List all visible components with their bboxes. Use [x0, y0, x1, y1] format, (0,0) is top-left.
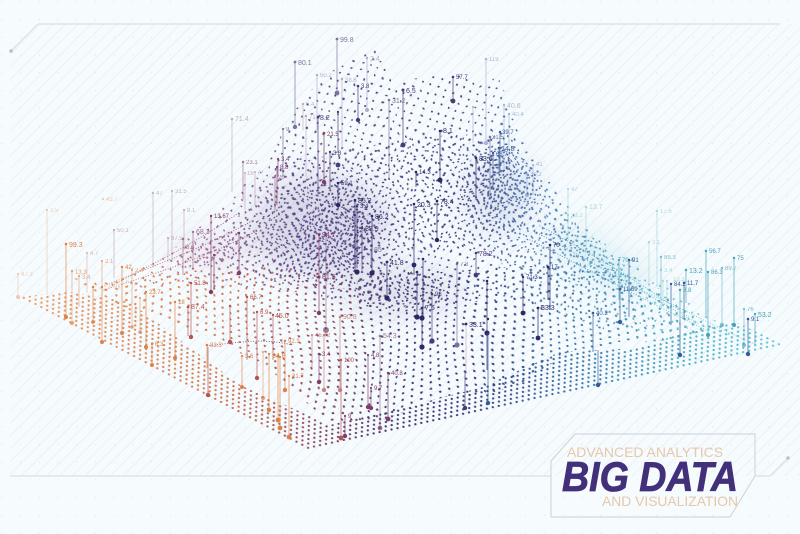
pin group: purple peak: 6.5 — [406, 88, 416, 95]
pin group: navy centre: 85.2 — [358, 198, 372, 205]
pin group: red and magenta centre left: 9.7 — [374, 386, 383, 392]
pin group: blue and cyan right: 17.5 — [660, 209, 672, 215]
pin group: purple peak: 40.6 — [507, 103, 521, 110]
pin group: orange left: 47 — [156, 191, 163, 197]
pin group: orange left: 2.1 — [105, 259, 114, 265]
pin group: navy centre: 78.4 — [440, 199, 454, 206]
pin group: navy centre: 98 — [435, 292, 442, 298]
pin group: purple peak: 83.6 — [479, 156, 493, 163]
pin group: orange left: 51.8 — [194, 281, 206, 287]
pin group: navy centre: 7.8 — [460, 262, 469, 268]
pin group: navy centre: 86.2 — [375, 214, 389, 221]
pin group: red and magenta centre left: 6.9 — [260, 310, 269, 316]
pin group: red and magenta centre left: 92.3 — [288, 339, 300, 345]
pin group: blue and cyan right: 89.7 — [725, 266, 737, 272]
pin group: purple peak: 14.8 — [501, 146, 515, 153]
pin group: purple peak: 119 — [489, 57, 499, 63]
pin group: red and magenta centre left: 13.67 — [214, 214, 230, 220]
pin group: blue and cyan right: 75 — [737, 256, 744, 262]
pin group: navy centre: 88.9 — [365, 226, 379, 233]
pin group: orange left: 47.3 — [21, 272, 33, 278]
pin group: orange left: 18 — [178, 300, 185, 306]
pin group: purple peak: 41 — [536, 162, 543, 168]
pin group: orange left: 8.1 — [187, 208, 196, 214]
pin group: purple peak: 50.2 — [320, 73, 332, 79]
frame line bottom right — [10, 456, 790, 476]
title box — [551, 434, 755, 517]
pin group: red and magenta centre left: 3.6 — [245, 354, 254, 360]
pin group: red and magenta centre left: 71.4 — [235, 116, 249, 123]
pin group: red and magenta centre left: 46.4 — [315, 333, 327, 339]
pin group: blue and cyan right: 53.2 — [758, 312, 772, 319]
pin group: red and magenta centre left: 8.8 — [280, 165, 289, 171]
pin group: navy centre: 20.3 — [417, 202, 431, 209]
pin group: blue and cyan right: 40.2 — [596, 311, 608, 317]
pin group: red and magenta centre left: 3.4 — [322, 352, 331, 358]
pin group: red and magenta centre left: 77 — [257, 170, 264, 176]
pin group: navy centre: 7.5 — [425, 305, 435, 312]
pin group: orange left: 2.4 — [135, 268, 144, 274]
pin group: orange left: 13.3 — [75, 270, 87, 276]
floor dot lattice — [22, 266, 780, 449]
pin group: red and magenta centre left: 2 — [327, 333, 331, 339]
pin group: red and magenta centre left: 20 — [278, 175, 285, 181]
pin group: red and magenta centre left: 8.6 — [186, 245, 195, 251]
pin group: blue and cyan right: 47 — [571, 187, 578, 193]
terrain scatter dots — [100, 50, 754, 346]
pin group: red and magenta centre left: 45.0 — [275, 313, 289, 320]
pin group: blue and cyan right: 23.2 — [571, 213, 583, 219]
pin group: orange left — [16, 189, 222, 397]
pin group: purple peak: 3.8 — [361, 84, 370, 90]
terrain tonal glow — [170, 157, 660, 312]
pin group: red and magenta centre left: 9 — [286, 127, 290, 133]
pin group: purple peak: 6.4 — [306, 102, 315, 108]
pin group: orange left: 23.7 — [149, 290, 161, 296]
pin group: blue and cyan right: 84.2 — [674, 282, 686, 288]
pin group: blue and cyan right: 70.4 — [622, 258, 634, 264]
pin group: orange left: 43.7 — [106, 197, 118, 203]
pin group: navy centre: 33.1 — [469, 322, 483, 329]
pin group: blue and cyan right: 76 — [747, 307, 754, 313]
pin group: orange left: 31.5 — [175, 189, 187, 195]
pin group: purple peak: 21.5 — [492, 135, 504, 141]
pin group: blue and cyan right: 11.7 — [687, 281, 699, 287]
pin group: red and magenta centre left: 66.7 — [250, 295, 262, 301]
pin group: orange left: 3.4 — [82, 275, 91, 281]
pin group: red and magenta centre left: 84.8 — [272, 353, 286, 360]
pin group: red and magenta centre left: 3.4 — [281, 157, 290, 163]
pin group: blue and cyan right: 13.7 — [589, 204, 603, 211]
title: big data: BIG DATA — [562, 453, 738, 500]
pin group: orange left: 50.1 — [117, 228, 129, 234]
pin group: navy centre: 78.2 — [479, 251, 493, 258]
pin group: blue and cyan right: 17 — [551, 265, 558, 271]
pin group: red and magenta centre left: 94.7 — [322, 232, 336, 239]
pin group: orange left: 42. — [125, 265, 134, 271]
pin group: red and magenta centre left: 90.8 — [343, 314, 357, 321]
pin group: orange left: 99.3 — [69, 242, 83, 249]
pin group: blue and cyan right: 86.3 — [711, 270, 723, 276]
pin group: red and magenta centre left: 81.5 — [322, 274, 336, 281]
pin group: red and magenta centre left — [182, 116, 403, 440]
pin group: orange left: 87.4 — [191, 304, 205, 311]
pin group: purple peak: 21.5 — [327, 132, 339, 138]
pin group: navy centre: 3.4 — [360, 204, 369, 210]
pin group: navy centre: 85 — [374, 247, 382, 254]
pin group: blue and cyan right: 89.3 — [664, 255, 676, 261]
data pins chart — [16, 37, 772, 440]
pin group: red and magenta centre left: 54.3 — [383, 333, 397, 340]
pin group: purple peak: 8.1 — [443, 128, 453, 135]
pin group: red and magenta centre left: 18 — [247, 171, 254, 177]
pin group: orange left: 3.5 — [50, 208, 59, 214]
pin group: blue and cyan right — [547, 187, 772, 387]
pin group: red and magenta centre left: 9 — [348, 414, 352, 420]
pin group: red and magenta centre left: 23.1 — [246, 160, 258, 166]
pin group: purple peak: 14.3 — [419, 170, 431, 176]
pin group: purple peak: 57.7 — [456, 75, 468, 81]
subtitle: advanced analytics: ADVANCED ANALYTICS — [567, 444, 723, 460]
pin group: purple peak: 31.2 — [392, 98, 406, 105]
pin group: blue and cyan right: 13.3 — [673, 277, 685, 283]
pin group: purple peak: 3.8 — [333, 151, 342, 157]
pin group: purple peak: 80.1 — [298, 60, 312, 67]
pin group: purple peak: 40.4 — [512, 112, 524, 118]
pin group: orange left: 4.7 — [90, 251, 99, 257]
pin group: blue and cyan right: 11.59 — [623, 287, 638, 293]
frame line top left — [9, 24, 780, 53]
pin group: purple peak: 71.2 — [309, 115, 321, 121]
pin group: blue and cyan right: 91 — [632, 258, 639, 264]
pin group: blue and cyan right: 56.7 — [709, 249, 721, 255]
pin group: red and magenta centre left: 4.8 — [371, 353, 380, 359]
pin group: blue and cyan right: 70 — [553, 243, 560, 249]
pin group: blue and cyan right: 3.8 — [683, 288, 692, 294]
pin group: navy centre: 41.8 — [390, 260, 404, 267]
subtitle: and visualization: AND VISUALIZATION — [602, 493, 738, 509]
pin group: purple peak — [293, 37, 543, 207]
pin group: purple peak: 39.7 — [502, 130, 514, 136]
pin group: red and magenta centre left: 40.8 — [391, 371, 403, 377]
pin group: red and magenta centre left: 68.3 — [196, 229, 210, 236]
pin group: blue and cyan right: 13.2 — [689, 268, 703, 275]
pin group: blue and cyan right: 3.1 — [652, 240, 661, 246]
pin group: purple peak: 63.7 — [496, 152, 508, 158]
pin group: blue and cyan right: 3.4 — [664, 268, 673, 274]
pin group: red and magenta centre left: 81.7 — [292, 374, 304, 380]
pin group: purple peak: 38.6 — [345, 78, 357, 84]
pin group: purple peak: 59.1 — [341, 181, 353, 187]
pin group: orange left: 83.3 — [210, 343, 222, 349]
pin group: orange left: 97.5 — [171, 236, 183, 242]
pin group: navy centre: 33.3 — [541, 305, 555, 312]
pin group: purple peak: 8.2 — [320, 115, 330, 122]
pin group: purple peak: 2.4 — [370, 56, 380, 63]
pin group: navy centre — [354, 198, 555, 410]
pin group: purple peak: 39.2 — [530, 172, 542, 178]
title box outline — [551, 434, 755, 517]
pin group: red and magenta centre left: 100 — [344, 358, 355, 364]
pin group: blue and cyan right: 9.1 — [751, 317, 760, 323]
pin group: purple peak: 99.8 — [340, 37, 354, 44]
pin group: orange left: 6.3 — [155, 342, 164, 348]
pin group: navy centre: 71.3 — [526, 275, 538, 281]
